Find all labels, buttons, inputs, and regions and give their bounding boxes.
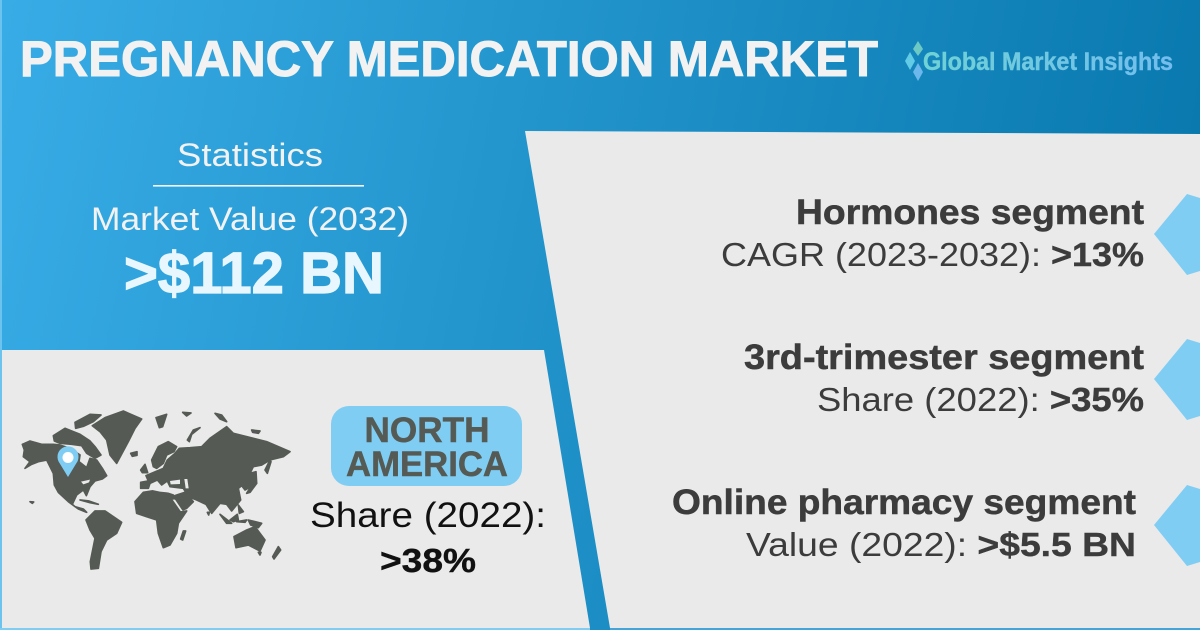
heading: Statistics: Statistics (177, 137, 323, 173)
segment: 3rd trimester (744, 338, 1144, 418)
label: market value: Market Value (2032) (91, 201, 409, 237)
value: share: >38% (380, 542, 476, 579)
world map (22, 411, 290, 569)
segment: online pharmacy: Value (2022): >$5.5 BN (746, 526, 1136, 563)
logo: Global Market Insights (905, 41, 1173, 81)
badge: north america: AMERICA (346, 445, 508, 484)
segment: hormones: CAGR (2023-2032): >13% (721, 236, 1144, 273)
icon: hexagon 1 (1154, 194, 1200, 275)
icon: hexagon 3 (1154, 485, 1200, 566)
icon: logo diamonds (905, 41, 923, 81)
badge: north america: NORTH (364, 411, 490, 450)
panel: north america (0, 0, 590, 630)
label: share: Share (2022): (310, 496, 546, 535)
segment: hormones: Hormones segment (796, 193, 1144, 232)
segment: 3rd trimester: Share (2022): >35% (817, 381, 1144, 418)
panel: statistics (91, 137, 409, 306)
badge: north america (331, 406, 522, 486)
value: market value: >$112 BN (124, 241, 384, 306)
panel: segments (525, 131, 1200, 630)
logo text: Global Market Insights (923, 48, 1173, 76)
icon: location pin (58, 446, 78, 477)
title: PREGNANCY MEDICATION MARKET (20, 31, 878, 87)
segment: online pharmacy: Online pharmacy segment (672, 483, 1136, 522)
icon: hexagon 2 (1154, 339, 1200, 420)
segment: 3rd trimester: 3rd-trimester segment (744, 338, 1144, 377)
segment: online pharmacy (672, 483, 1136, 563)
segment: hormones (721, 193, 1144, 273)
